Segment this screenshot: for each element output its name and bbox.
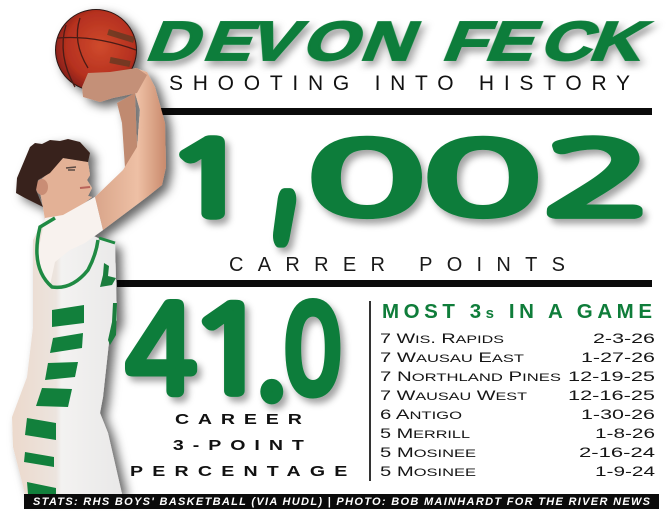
ear (36, 179, 48, 195)
game rows: 1-30-26 (581, 407, 655, 422)
white undershirt sleeve (36, 197, 103, 285)
big number: three point percentage (126, 291, 341, 410)
big number: career points (166, 47, 652, 238)
game rows: 2-16-24 (579, 445, 656, 460)
armhole trim (99, 238, 115, 243)
footer credit bar: STATS: RHS BOYS' BASKETBALL (VIA HUDL) | PHOTO: BOB MAINHARDT FOR THE RIVER NEWS (33, 496, 651, 508)
game rows: 1-9-24 (595, 464, 656, 479)
jersey collar trim (37, 218, 98, 287)
game rows: 1-8-26 (595, 426, 655, 441)
game rows: 6 A NTIGO (380, 407, 463, 422)
panel heading: MOST 3 s IN A GAME (382, 300, 652, 323)
big number: career points: 1 (166, 129, 251, 229)
game rows: 7 W AUSAU W EST (380, 388, 527, 403)
neck and face (38, 158, 92, 220)
game rows: 5 M OSINEE (380, 464, 476, 479)
big number: career points: 0 (423, 129, 541, 229)
jersey and shorts (12, 218, 122, 494)
basketball (56, 10, 136, 90)
big number: career points: 0 (307, 129, 425, 229)
player body with shadow (12, 10, 166, 494)
game rows: 1-27-26 (581, 350, 655, 365)
game rows: 5 M OSINEE (380, 445, 476, 460)
panel: most 3s in a game (380, 300, 656, 479)
game rows: 7 W AUSAU E AST (380, 350, 524, 365)
player photo illustration (12, 10, 166, 494)
big number: three point percentage: 4 (126, 291, 196, 409)
game rows: 12-19-25 (568, 369, 655, 384)
game rows (380, 331, 656, 479)
jersey stripes (24, 305, 84, 494)
rule: upper black bar (160, 108, 652, 115)
big number: career points: , (271, 47, 299, 238)
label: percentage: PERCENTAGE (130, 463, 347, 479)
subtitle: SHOOTING INTO HISTORY (169, 72, 630, 95)
big number: three point percentage: 0 (284, 293, 341, 410)
back arm (117, 93, 137, 168)
rule: vertical divider (369, 301, 371, 481)
game rows: 2-3-26 (593, 331, 655, 346)
title: DEVON FECK (139, 11, 659, 72)
hair (16, 139, 90, 207)
facial features (66, 167, 76, 170)
label: career: CAREER (175, 411, 302, 427)
game rows: 5 M ERRILL (380, 426, 470, 441)
big number: three point percentage: . (255, 292, 287, 410)
jersey lettering (100, 263, 117, 345)
label: career points: CARRER POINTS (229, 254, 565, 276)
hand over ball (82, 68, 147, 102)
big number: three point percentage: 1 (187, 291, 273, 409)
label: 3-point: 3-POINT (173, 437, 304, 453)
shooting arm (95, 68, 166, 230)
game rows: 7 W IS . R APIDS (380, 331, 504, 346)
rule: lower black bar (117, 280, 652, 287)
game rows: 7 N ORTHLAND P INES (380, 369, 561, 384)
game rows: 12-16-25 (568, 388, 655, 403)
big number: career points: 2 (543, 129, 652, 229)
